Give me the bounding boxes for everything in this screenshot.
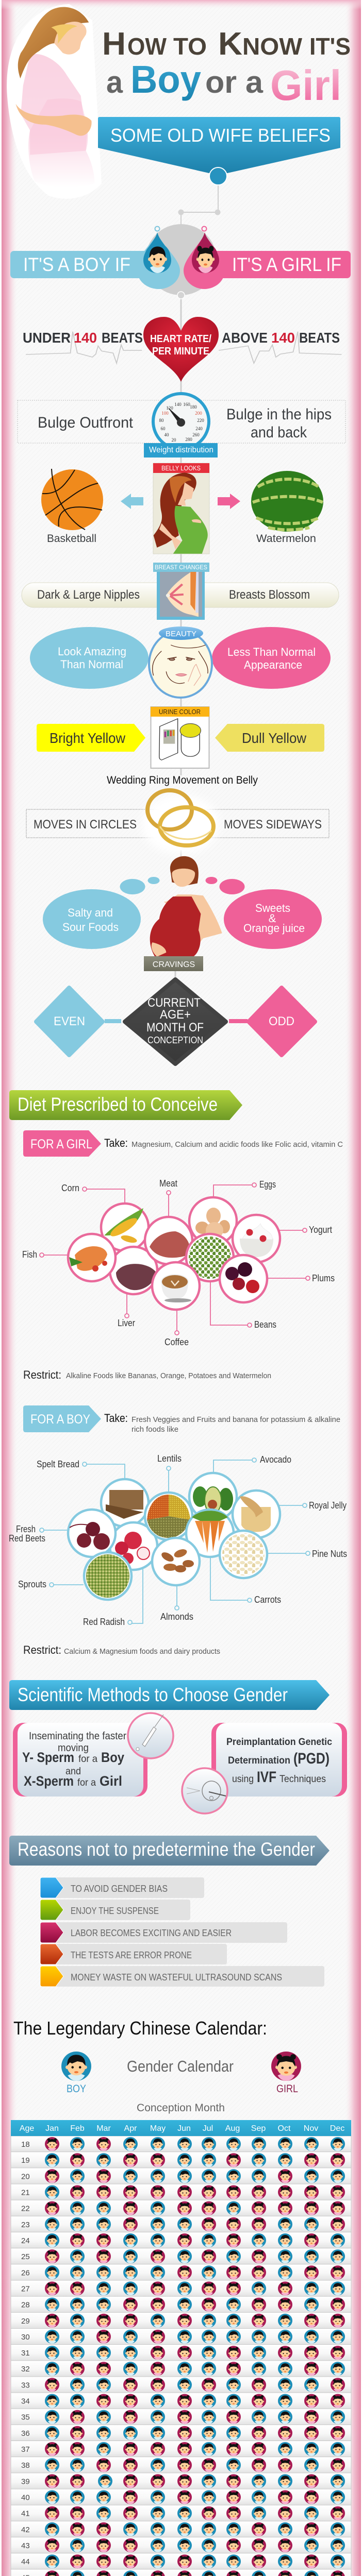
icon: embryo injection xyxy=(182,1768,227,1814)
panel: belly looks xyxy=(153,463,209,554)
text: boy diet take: Fresh Veggies and Fruits and banana for potassium & alkaline xyxy=(131,1415,340,1424)
icon: weighing scale dial: 180 xyxy=(190,404,197,410)
banner: some old wife beliefs: SOME OLD WIFE BELIEFS xyxy=(110,125,331,146)
rows: 20 xyxy=(21,2172,30,2181)
text: under 140 beats: UNDER xyxy=(23,330,71,346)
panel: age plus month formula: EVEN xyxy=(54,1014,85,1028)
rows: 41 xyxy=(21,2510,30,2518)
reason 1 xyxy=(40,1877,204,1898)
reason 4: THE TESTS ARE ERROR PRONE xyxy=(71,1950,192,1960)
callout lines and labels xyxy=(40,1458,310,1624)
callout lines and labels xyxy=(40,1183,310,1335)
panel: PGD method: using xyxy=(232,1774,254,1785)
panel: cravings pink: Orange juice xyxy=(243,922,305,935)
panel: belly looks: BELLY LOOKS xyxy=(161,464,201,472)
panel: beauty blue: Look Amazing xyxy=(58,645,126,658)
eggs xyxy=(189,1197,237,1245)
rows: 33 xyxy=(21,2381,30,2389)
icon: beauty face xyxy=(149,631,212,698)
reason 4 xyxy=(40,1944,227,1964)
banner: some old wife beliefs xyxy=(98,117,340,185)
panel: sperm insemination method: and xyxy=(65,1766,81,1777)
heading: diet prescribed to conceive: Diet Prescribed to Conceive xyxy=(18,1094,218,1115)
icon: weighing scale dial: 120 xyxy=(166,405,173,411)
reason 2: ENJOY THE SUSPENSE xyxy=(71,1906,159,1916)
food diagram: for a boy: Pine Nuts xyxy=(312,1549,347,1559)
tag: dull yellow: Dull Yellow xyxy=(242,730,307,746)
panel: cravings pink: & xyxy=(269,912,276,925)
rows: 18 xyxy=(21,2140,30,2149)
connector lines xyxy=(175,185,221,978)
panel: PGD method: Preimplantation Genetic xyxy=(226,1737,332,1748)
panel: breast changes: Dark & Large Nipples xyxy=(37,588,140,602)
icon: weighing scale dial: 220 xyxy=(197,418,204,423)
legend: boy icon xyxy=(61,2052,91,2095)
panel: it's a girl if: IT'S A GIRL IF xyxy=(232,254,341,275)
title: NOW xyxy=(242,33,303,60)
panel: age plus month formula: ODD xyxy=(269,1014,294,1028)
panel: sperm insemination method: moving xyxy=(58,1742,89,1754)
panel: cravings pink: Sweets xyxy=(255,902,290,914)
icon: weighing scale dial: 260 xyxy=(192,432,200,437)
yogurt xyxy=(233,1215,280,1262)
food diagram: for a boy: Sprouts xyxy=(18,1579,46,1589)
reason 5 xyxy=(40,1966,324,1987)
tag: dull yellow xyxy=(215,724,324,752)
text: girl diet restrict: Alkaline Foods like Bananas, Orange, Potatoes and Watermelon xyxy=(66,1371,271,1380)
panel: beauty pink: Appearance xyxy=(244,658,302,671)
rows: 37 xyxy=(21,2445,30,2454)
tag: bright yellow xyxy=(37,724,145,752)
icon: heart rate xyxy=(143,317,219,382)
text: above 140 beats xyxy=(222,330,340,346)
heading: diet prescribed to conceive xyxy=(9,1090,242,1120)
text: under 140 beats: BEATS xyxy=(102,330,143,346)
table header: May xyxy=(150,2124,166,2133)
title xyxy=(102,26,351,109)
reason 2 xyxy=(40,1900,190,1920)
panel: sperm insemination method: X-Sperm xyxy=(24,1773,74,1789)
icon: weighing scale dial: 100 xyxy=(161,411,169,416)
panel: beauty pink xyxy=(212,627,331,689)
panel: it's a girl if xyxy=(184,227,351,289)
rows: 42 xyxy=(21,2526,30,2534)
heading: reasons not to predetermine xyxy=(9,1836,330,1866)
heading: gender calendar: Gender Calendar xyxy=(127,2057,234,2075)
panel: sperm insemination method: for a xyxy=(78,1754,97,1765)
table header: Dec xyxy=(330,2124,344,2133)
icon: heart rate: HEART RATE/ xyxy=(150,333,211,345)
rows xyxy=(21,2137,345,2576)
food diagram: for a boy: Almonds xyxy=(160,1612,193,1622)
panel: age plus month formula xyxy=(36,979,315,1064)
rows: 25 xyxy=(21,2252,30,2261)
icon: wedding rings xyxy=(142,790,219,854)
panel: urine color: URINE COLOR xyxy=(159,708,201,716)
panel: age plus month formula: CONCEPTION xyxy=(147,1035,203,1045)
panel: weight distribution: and back xyxy=(251,424,307,441)
text: girl diet take: Magnesium, Calcium and acidic foods like Folic acid, vitamin C xyxy=(131,1140,343,1149)
heading: reasons not to predetermine: Reasons not to predetermine the Gender xyxy=(18,1839,315,1860)
heading: wedding ring movement: Wedding Ring Movement on Belly xyxy=(107,774,258,786)
title: IT'S xyxy=(309,33,351,60)
table header: Sep xyxy=(251,2124,266,2133)
plums xyxy=(220,1255,267,1302)
corn xyxy=(101,1204,149,1251)
icon: weighing scale dial: 160 xyxy=(183,402,190,407)
food diagram: for a girl: Liver xyxy=(118,1318,135,1328)
rows: 40 xyxy=(21,2494,30,2502)
panel: breast changes: Breasts Blossom xyxy=(229,588,310,602)
tag: for a boy xyxy=(23,1405,101,1432)
text: boy diet restrict xyxy=(23,1643,220,1656)
food diagram: for a boy: Red Radish xyxy=(83,1617,125,1627)
icon: basketball xyxy=(41,469,103,530)
text: boy diet take: Take: xyxy=(104,1412,128,1425)
food diagram: for a girl: Meat xyxy=(159,1178,177,1189)
rows: 30 xyxy=(21,2333,30,2342)
icon: weighing scale dial: 280 xyxy=(185,437,192,442)
food diagram: for a girl: Coffee xyxy=(164,1337,189,1347)
panel: weight distribution: Weight distribution xyxy=(149,446,213,454)
tag: for a boy: FOR A BOY xyxy=(30,1412,90,1427)
panel: it's a boy if: IT'S A BOY IF xyxy=(23,254,130,275)
red radish xyxy=(110,1522,157,1570)
text: girl diet restrict: Restrict: xyxy=(23,1368,61,1381)
panel: urine color xyxy=(151,707,209,768)
table header: Apr xyxy=(124,2124,137,2133)
rows: 24 xyxy=(21,2236,30,2245)
rows: 32 xyxy=(21,2365,30,2374)
heading: the legendary chinese calendar: The Legendary Chinese Calendar: xyxy=(13,2018,267,2039)
rows: 23 xyxy=(21,2221,30,2229)
panel: it's a boy if xyxy=(10,227,180,289)
panel: breast changes: BREAST CHANGES xyxy=(155,564,207,571)
panel: cravings pink xyxy=(205,877,322,949)
panel: weight distribution xyxy=(18,394,345,457)
panel: wedding ring movement: MOVES IN CIRCLES xyxy=(34,818,137,832)
table header: Mar xyxy=(96,2124,111,2133)
tag: for a girl xyxy=(23,1130,101,1157)
title: OW xyxy=(127,33,167,60)
label: watermelon: Watermelon xyxy=(256,533,316,545)
legend: girl icon: GIRL xyxy=(276,2083,298,2095)
rows: 27 xyxy=(21,2284,30,2293)
panel: beauty blue xyxy=(30,627,149,689)
panel: cravings blue: Salty and xyxy=(68,906,113,919)
carrots xyxy=(186,1510,234,1557)
royal jelly xyxy=(233,1490,280,1538)
label: cravings xyxy=(144,956,203,971)
panel: PGD method: (PGD) xyxy=(293,1750,330,1767)
lentils xyxy=(145,1493,192,1540)
panel: sperm insemination method: Boy xyxy=(101,1750,124,1765)
ECG lines xyxy=(26,332,341,363)
text: under 140 beats: 140 xyxy=(74,330,97,346)
illustration: woman in green dress xyxy=(154,472,208,554)
food diagram: for a boy: Spelt Bread xyxy=(37,1459,79,1469)
icon: watermelon xyxy=(251,471,323,532)
table: chinese gender calendar xyxy=(11,2120,351,2576)
title: a xyxy=(106,65,123,99)
icon: weighing scale dial xyxy=(153,394,209,449)
panel: sperm insemination method xyxy=(13,1713,173,1797)
icon: weighing scale dial: 20 xyxy=(171,437,176,443)
almonds xyxy=(152,1538,200,1585)
panel: sperm insemination method: Y- Sperm xyxy=(22,1750,74,1765)
rows: 26 xyxy=(21,2268,30,2277)
label: basketball: Basketball xyxy=(47,533,96,545)
panel: sperm insemination method: Girl xyxy=(100,1773,122,1789)
pill: beauty: BEAUTY xyxy=(166,630,196,638)
food diagram: for a boy: Lentils xyxy=(157,1453,182,1464)
rows: 19 xyxy=(21,2156,30,2165)
bread xyxy=(101,1479,149,1527)
arrow: to watermelon xyxy=(218,494,240,509)
title: H xyxy=(102,26,126,62)
avocado xyxy=(189,1473,237,1520)
rows: 31 xyxy=(21,2349,30,2358)
illustration: breast anatomy xyxy=(166,572,199,617)
tag: for a girl: FOR A GIRL xyxy=(30,1137,92,1151)
title: K xyxy=(218,26,242,62)
table header xyxy=(11,2120,351,2136)
illustration: craving woman xyxy=(150,856,222,957)
icon: weighing scale dial: 80 xyxy=(159,418,164,423)
table header: Feb xyxy=(70,2124,85,2133)
label: cravings: CRAVINGS xyxy=(153,960,195,969)
panel: cravings blue xyxy=(43,877,160,949)
panel: sperm insemination method: for a xyxy=(77,1777,96,1788)
food diagram: for a girl: Beans xyxy=(254,1319,276,1330)
rows: 29 xyxy=(21,2317,30,2326)
food diagram: for a girl: Fish xyxy=(22,1249,37,1260)
panel: age plus month formula: MONTH OF xyxy=(146,1021,204,1035)
food diagram: for a girl: Plums xyxy=(312,1273,335,1283)
title: or a xyxy=(205,65,264,99)
text: girl diet restrict xyxy=(23,1368,271,1381)
rows: 36 xyxy=(21,2429,30,2438)
panel: beauty blue: Than Normal xyxy=(60,658,123,671)
icon: heart rate: PER MINUTE xyxy=(152,346,209,357)
table header: Aug xyxy=(225,2124,240,2133)
food diagram: for a boy: Royal Jelly xyxy=(309,1500,347,1511)
panel: wedding ring movement: MOVES SIDEWAYS xyxy=(224,818,322,832)
icon: test strip and sample cup xyxy=(159,719,201,760)
title: TO xyxy=(173,33,207,60)
beans xyxy=(186,1234,234,1281)
reason 1: TO AVOID GENDER BIAS xyxy=(71,1884,168,1894)
red beets xyxy=(68,1510,116,1557)
list: reasons xyxy=(40,1877,324,1987)
icon: weighing scale dial: 140 xyxy=(174,402,182,407)
rows: 43 xyxy=(21,2541,30,2550)
food diagram: for a girl: Eggs xyxy=(259,1179,276,1190)
food diagram: for a girl: Corn xyxy=(61,1183,79,1193)
table header: Oct xyxy=(278,2124,291,2133)
panel: PGD method: IVF xyxy=(257,1769,276,1786)
reason 3: LABOR BECOMES EXCITING AND EASIER xyxy=(71,1928,232,1938)
table header: Nov xyxy=(304,2124,318,2133)
pill: beauty xyxy=(159,626,203,640)
text: above 140 beats: BEATS xyxy=(299,330,340,346)
icon: weighing scale dial: 200 xyxy=(195,411,202,416)
food diagram: for a boy xyxy=(9,1453,347,1627)
sprouts xyxy=(84,1552,131,1600)
text: boy diet restrict: Restrict: xyxy=(23,1643,61,1656)
legend: girl icon xyxy=(271,2052,301,2095)
text: girl diet take xyxy=(104,1137,343,1149)
panel: weight distribution: Bulge Outfront xyxy=(38,414,134,431)
table header: Age xyxy=(20,2124,34,2133)
text: above 140 beats: ABOVE xyxy=(222,330,268,346)
rows: 28 xyxy=(21,2301,30,2310)
panel: age plus month formula: CURRENT xyxy=(147,996,201,1010)
title: Boy xyxy=(130,58,201,101)
fish xyxy=(68,1234,116,1281)
text: under 140 beats xyxy=(23,330,143,346)
liver xyxy=(110,1247,157,1294)
tag: bright yellow: Bright Yellow xyxy=(50,730,126,746)
text: boy diet take: rich foods like xyxy=(131,1425,178,1434)
text: boy diet take xyxy=(104,1412,340,1434)
table header: Jul xyxy=(203,2124,213,2133)
illustration: pregnant woman xyxy=(7,4,102,199)
title: Girl xyxy=(270,61,341,109)
panel: weight distribution: Bulge in the hips xyxy=(226,406,332,423)
food diagram: for a boy: Red Beets xyxy=(9,1533,45,1544)
panel: wedding ring movement xyxy=(26,790,329,854)
panel: PGD method xyxy=(182,1723,347,1814)
label: conception month: Conception Month xyxy=(137,2102,225,2114)
text: girl diet take: Take: xyxy=(104,1137,128,1149)
rows: 38 xyxy=(21,2461,30,2470)
pine nuts xyxy=(220,1531,267,1578)
rows: 22 xyxy=(21,2205,30,2213)
panel: PGD method: Techniques xyxy=(279,1774,326,1785)
food diagram: for a girl: Yogurt xyxy=(309,1225,332,1235)
text: above 140 beats: 140 xyxy=(271,330,295,346)
food diagram: for a girl xyxy=(22,1178,335,1347)
heading: scientific methods xyxy=(9,1680,330,1710)
coffee xyxy=(152,1262,200,1310)
rows: 39 xyxy=(21,2477,30,2486)
rows: 34 xyxy=(21,2397,30,2406)
icon: syringe xyxy=(128,1713,173,1758)
circle behind boy and girl drops xyxy=(145,224,217,295)
heading: scientific methods: Scientific Methods to Choose Gender xyxy=(18,1684,288,1705)
table header: Jun xyxy=(177,2124,191,2133)
panel: sperm insemination method: Inseminating the faster xyxy=(29,1731,126,1742)
table header: Jan xyxy=(45,2124,59,2133)
panel: cravings blue: Sour Foods xyxy=(62,921,119,934)
food diagram: for a boy: Carrots xyxy=(254,1595,281,1605)
food diagram: for a boy: Avocado xyxy=(260,1454,291,1465)
reason 3 xyxy=(40,1922,287,1943)
text: boy diet restrict: Calcium & Magnesium foods and dairy products xyxy=(64,1647,220,1656)
meat xyxy=(145,1217,192,1264)
panel: PGD method: Determination xyxy=(228,1755,290,1766)
reason 5: MONEY WASTE ON WASTEFUL ULTRASOUND SCANS xyxy=(71,1972,282,1982)
panel: breast changes xyxy=(22,563,339,620)
arrow: to basketball xyxy=(121,494,143,509)
icon: weighing scale dial: 60 xyxy=(161,426,166,431)
panel: age plus month formula: AGE+ xyxy=(160,1008,191,1022)
rows: 21 xyxy=(21,2189,30,2197)
panel: beauty pink: Less Than Normal xyxy=(227,646,316,658)
legend: boy icon: BOY xyxy=(67,2083,86,2095)
icon: weighing scale dial: 240 xyxy=(195,426,203,431)
icon: weighing scale dial: 40 xyxy=(164,432,169,437)
rows: 44 xyxy=(21,2557,30,2566)
food diagram: for a boy: Fresh xyxy=(16,1524,36,1534)
rows: 35 xyxy=(21,2413,30,2422)
